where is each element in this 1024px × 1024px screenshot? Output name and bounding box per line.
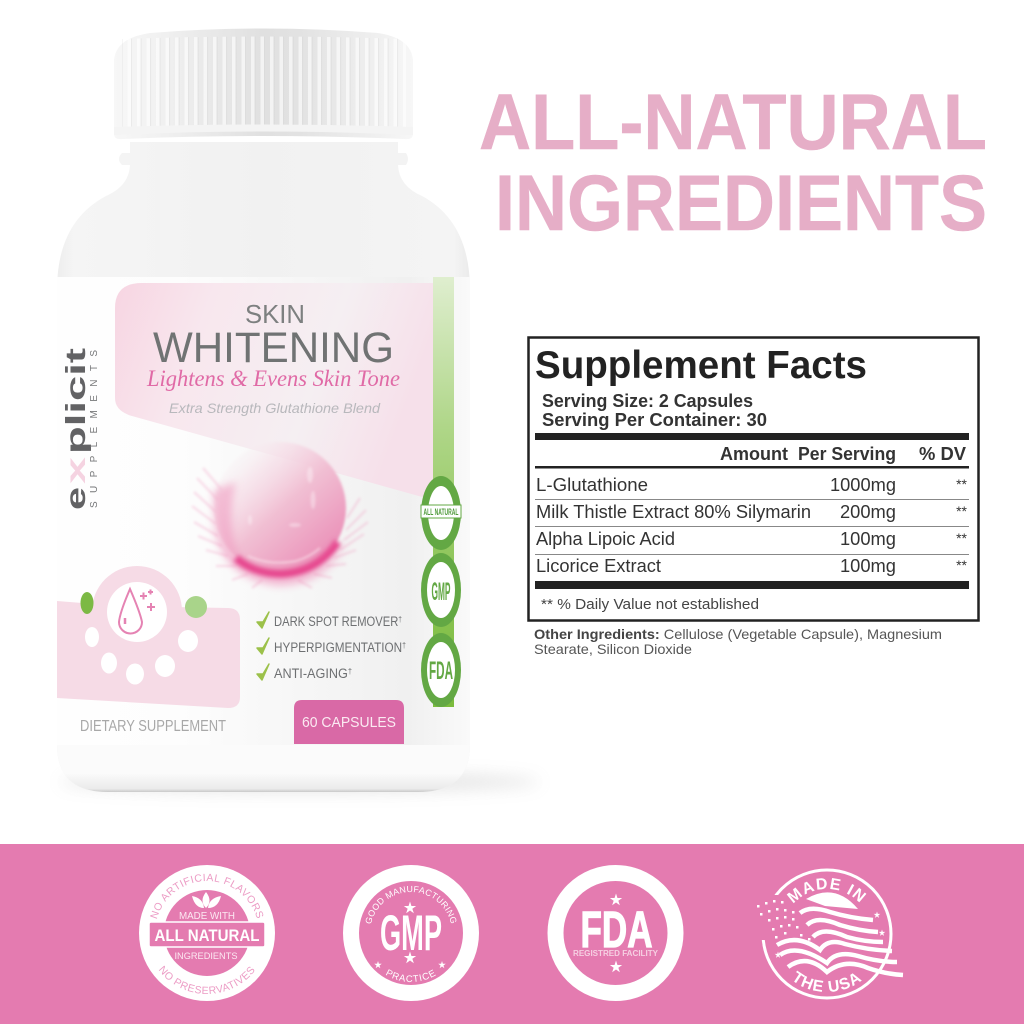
product label — [57, 277, 470, 745]
ingredient rows: ** — [956, 557, 968, 573]
green dots — [80, 592, 94, 614]
benefits checklist: † — [348, 667, 352, 676]
left fur blush — [213, 482, 244, 568]
benefits checklist — [257, 612, 406, 681]
bottom band — [0, 844, 1024, 1024]
ingredient rows: Alpha Lipoic Acid — [536, 529, 675, 549]
stars — [374, 902, 446, 968]
green badge: GMP: GMP — [432, 578, 450, 606]
badge: FDA: FDA — [580, 901, 652, 958]
ring text: NO ARTIFICIAL FLAVORS — [150, 874, 264, 919]
ring text: NO PRESERVATIVES — [158, 966, 254, 994]
all natural band — [149, 922, 265, 947]
other ingredients: Stearate, Silicon Dioxide — [534, 641, 692, 657]
brand logo: plicit — [60, 348, 91, 454]
hero sphere — [192, 442, 368, 588]
panel title: Supplement Facts — [535, 344, 867, 387]
flag stars field — [757, 900, 885, 958]
pink header shape — [115, 283, 433, 500]
other ingredients — [534, 626, 942, 657]
ring text — [786, 878, 866, 992]
highlight — [248, 548, 320, 563]
product title: WHITENING — [153, 324, 394, 372]
product title: SKIN — [245, 299, 305, 329]
bottle shadow — [60, 772, 540, 792]
serving info: Serving Size: 2 Capsules — [542, 391, 753, 411]
serving info — [542, 391, 767, 430]
badge: FDA — [556, 873, 676, 993]
ingredient rows: L-Glutathione — [536, 475, 648, 495]
badge: FDA: REGISTRED FACILITY — [573, 949, 659, 958]
brand logo: SUPPLEMENTS — [89, 350, 100, 508]
green badge: GMP — [421, 553, 461, 627]
ring text — [366, 886, 456, 982]
column headers: Per Serving — [798, 444, 896, 464]
ingredient rows: Licorice Extract — [536, 556, 661, 576]
ingredient rows: 1000mg — [830, 475, 896, 495]
column headers — [720, 444, 966, 464]
column headers: % DV — [919, 444, 966, 464]
green badge: all natural — [421, 476, 461, 550]
white drop circle — [107, 582, 167, 642]
ring text: MADE IN — [786, 878, 866, 904]
benefits checklist: DARK SPOT REMOVER — [274, 614, 424, 629]
heading — [479, 77, 987, 247]
dietary supplement: DIETARY SUPPLEMENT — [80, 718, 226, 735]
pink skin panel — [57, 566, 240, 708]
benefits checklist: † — [402, 641, 406, 650]
sphere — [214, 442, 346, 574]
leaf icon — [192, 892, 221, 908]
ingredient rows: ** — [956, 530, 968, 546]
bottle body — [57, 142, 470, 792]
ingredient rows — [536, 475, 968, 576]
badge: made in the USA — [757, 868, 904, 1000]
brand logo — [60, 348, 100, 510]
badge: GMP: GMP — [380, 905, 442, 961]
green badge: all natural: ALL NATURAL — [424, 507, 459, 517]
ring text: PRACTICE — [386, 969, 436, 982]
flag stripes — [777, 909, 903, 975]
serving info: Serving Per Container: 30 — [542, 410, 767, 430]
badge: all natural: MADE WITH — [179, 911, 235, 922]
other ingredients: Other Ingredients: Cellulose (Vegetable Capsule), Magnesium — [534, 626, 942, 642]
ingredient rows: ** — [956, 503, 968, 519]
ingredient rows: 100mg — [840, 529, 896, 549]
green badge: FDA — [421, 633, 461, 707]
brand logo: x — [60, 456, 91, 484]
green stripe — [433, 277, 454, 707]
badge: all natural: INGREDIENTS — [174, 951, 238, 962]
bottle — [57, 28, 540, 792]
icon: water drop — [119, 589, 155, 634]
ring text — [150, 874, 264, 994]
badge: GMP — [343, 865, 479, 1001]
bottle cap — [114, 28, 413, 139]
badge: all natural: ALL NATURAL — [154, 926, 260, 945]
brand logo: e — [60, 487, 91, 510]
ring text: GOOD MANUFACTURING — [366, 886, 456, 924]
footnote: ** % Daily Value not established — [541, 597, 759, 613]
ingredient rows: ** — [956, 476, 968, 492]
badge: all natural — [139, 865, 275, 1001]
ingredient rows: 100mg — [840, 556, 896, 576]
product title — [146, 299, 400, 416]
60 capsules tag — [294, 700, 404, 744]
benefits checklist: † — [398, 615, 402, 624]
flag sun — [806, 892, 858, 909]
fur rays — [192, 468, 368, 588]
bottle base — [57, 745, 470, 792]
column headers: Amount — [720, 444, 788, 464]
ingredient rows: 200mg — [840, 502, 896, 522]
bright crescent — [236, 542, 338, 574]
green badge: FDA: FDA — [429, 657, 453, 685]
soft halo — [212, 520, 352, 586]
supplement facts panel — [528, 338, 978, 620]
benefits checklist: HYPERPIGMENTATION — [274, 640, 421, 655]
ring text: THE USA — [794, 970, 862, 992]
60 capsules tag: 60 CAPSULES — [302, 714, 396, 731]
heading: INGREDIENTS — [495, 158, 987, 247]
product title: Lightens & Evens Skin Tone — [146, 366, 400, 391]
white dots — [85, 627, 99, 647]
ingredient rows: Milk Thistle Extract 80% Silymarin — [536, 502, 811, 522]
heading: ALL-NATURAL — [479, 77, 987, 166]
product title: Extra Strength Glutathione Blend — [169, 400, 381, 416]
benefits checklist: ANTI-AGING — [274, 666, 353, 681]
